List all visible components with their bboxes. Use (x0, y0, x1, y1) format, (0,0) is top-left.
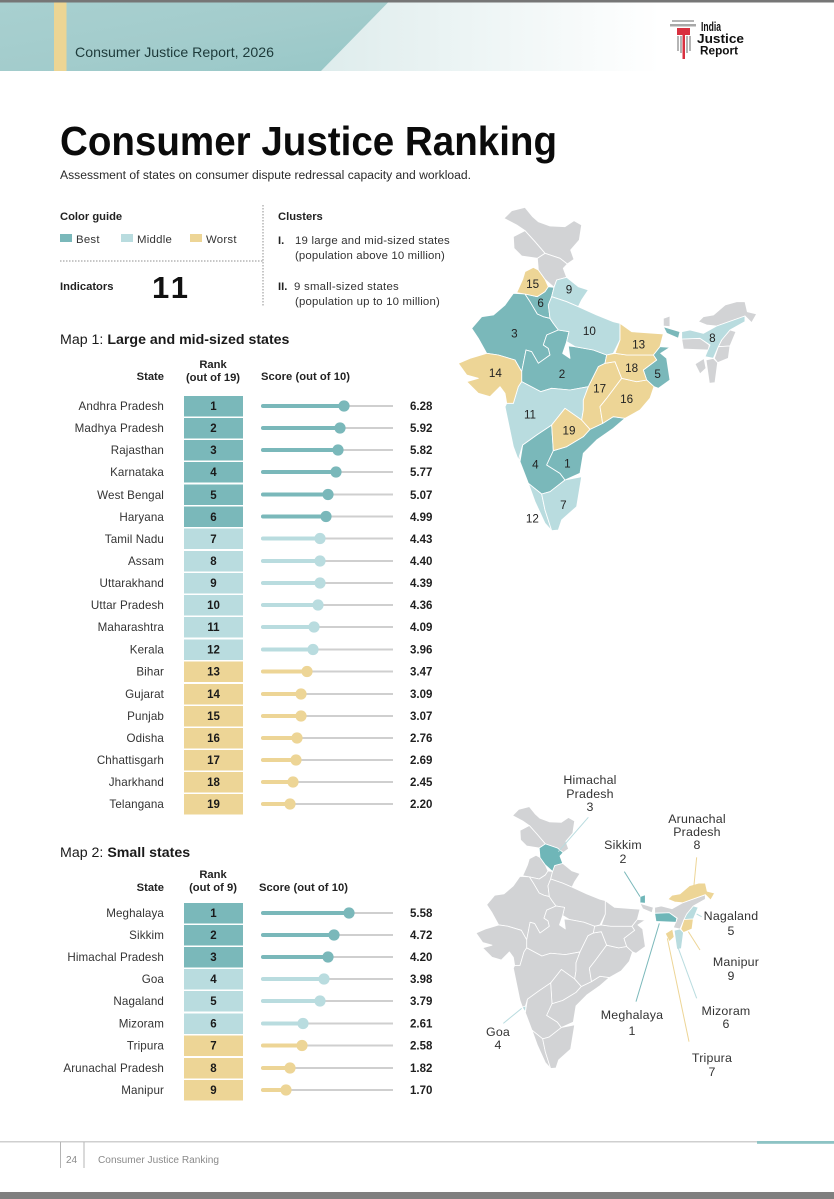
row: Kerala (130, 640, 432, 660)
clusters: Clusters (278, 211, 323, 223)
table 1 header: State (137, 371, 164, 383)
row: Assam: Assam (128, 555, 164, 568)
map 2 state labels: 4 (494, 1038, 502, 1052)
map 2 state labels: 2 (619, 852, 627, 866)
row: Telangana: 19 (207, 799, 220, 811)
row: Gujarat (125, 684, 432, 704)
row: Rajasthan: 3 (210, 445, 217, 457)
row: Goa: 3.98 (410, 974, 433, 986)
row: Himachal Pradesh: Himachal Pradesh (67, 951, 164, 964)
row: Tripura (127, 1036, 433, 1056)
logo: India Justice Report: Report (700, 44, 738, 58)
color guide: Middle (137, 234, 172, 246)
row: Arunachal Pradesh: Arunachal Pradesh (63, 1062, 164, 1075)
row: Tripura: 2.58 (410, 1040, 433, 1052)
row: Mizoram: Mizoram (119, 1018, 164, 1030)
row: Gujarat: 3.09 (410, 689, 432, 701)
map 2 state labels: 7 (708, 1065, 716, 1079)
footer section name: Consumer Justice Ranking (98, 1155, 219, 1166)
map 1 rank numbers: 15 (526, 278, 539, 291)
map 1 rank numbers: 2 (559, 368, 565, 381)
row: Andhra Pradesh: Andhra Pradesh (79, 400, 164, 413)
row: Arunachal Pradesh: 8 (210, 1063, 217, 1075)
logo: India Justice Report: India (701, 20, 722, 34)
row: Haryana: 4.99 (410, 512, 432, 524)
indicators count: 11 (152, 270, 188, 305)
map 1 rank numbers (489, 278, 716, 525)
row: Mizoram: 6 (210, 1018, 217, 1030)
map 1 rank numbers: 13 (632, 339, 645, 352)
row: Manipur (121, 1080, 432, 1100)
map 1 rank numbers: 7 (560, 499, 567, 512)
map 2 state labels: Tripura (692, 1051, 732, 1065)
title: Consumer Justice Ranking (60, 118, 557, 164)
row: Uttar Pradesh (91, 595, 432, 616)
map 2 leader lines (503, 817, 702, 1042)
map 1 rank numbers: 16 (620, 393, 633, 406)
row: Jharkhand: Jharkhand (109, 776, 164, 789)
row: Goa: Goa (142, 973, 164, 986)
row: Goa: 4 (210, 974, 217, 986)
map 1 rank numbers: 18 (625, 362, 638, 375)
row: Karnataka: Karnataka (110, 466, 164, 479)
map 1 rank numbers: 3 (511, 328, 518, 341)
map 1 rank numbers: 4 (532, 458, 539, 471)
row: Rajasthan: Rajasthan (111, 444, 164, 457)
map 1 rank numbers: 12 (526, 512, 539, 525)
row: Tamil Nadu (105, 528, 432, 549)
row: Assam: 4.40 (410, 556, 432, 568)
row: Maharashtra: 11 (207, 622, 220, 634)
table 1 header: Score (out of 10) (261, 371, 350, 383)
row: Uttarakhand (100, 573, 432, 594)
row: West Bengal: 5 (210, 490, 217, 502)
table 2 header: State (137, 882, 164, 894)
map 2 state labels: 5 (727, 924, 735, 938)
row: Haryana (119, 506, 432, 527)
row: Punjab: Punjab (127, 710, 164, 723)
table 2 header: (out of 9) (189, 882, 237, 894)
map 1 rank numbers: 8 (709, 332, 716, 345)
row: Tamil Nadu: 7 (210, 534, 217, 546)
header band (0, 0, 834, 71)
row: Tripura: Tripura (127, 1040, 164, 1052)
row: Madhya Pradesh: 5.92 (410, 423, 432, 435)
row: Goa (142, 969, 433, 990)
row: Rajasthan (111, 440, 432, 460)
row: Nagaland (113, 991, 432, 1012)
map 2 state labels: 1 (628, 1024, 636, 1038)
row: Bihar: Bihar (136, 666, 164, 678)
row: Telangana (109, 794, 432, 814)
row: Arunachal Pradesh (63, 1058, 432, 1078)
map 2 state labels: Sikkim (604, 838, 642, 852)
row: Gujarat: Gujarat (125, 688, 165, 701)
indicators count (60, 270, 188, 305)
page number: 24 (66, 1155, 78, 1166)
map 2 state labels: Himachal (563, 773, 617, 787)
row: Karnataka: 5.77 (410, 467, 432, 479)
row: Mizoram (119, 1014, 433, 1034)
logo: India Justice Report (670, 20, 744, 59)
row: Andhra Pradesh (79, 396, 433, 416)
map 2 state labels: Pradesh (566, 787, 614, 801)
row: Uttar Pradesh: 10 (207, 600, 220, 612)
row: Tamil Nadu: Tamil Nadu (105, 533, 164, 546)
row: Meghalaya (106, 903, 433, 924)
indicators count: Indicators (60, 281, 113, 293)
row: Haryana: Haryana (119, 511, 164, 524)
row: Meghalaya: 1 (210, 908, 217, 920)
row: Odisha (127, 728, 432, 748)
map 2 state labels: Manipur (713, 955, 759, 969)
map 1 rank numbers: 14 (489, 367, 502, 380)
row: Kerala: 3.96 (410, 644, 432, 656)
map 2 state labels: 9 (727, 969, 735, 983)
row: Telangana: 2.20 (410, 799, 432, 811)
color guide: Best (76, 234, 100, 246)
row: Kerala: Kerala (130, 644, 164, 656)
map 1 rank numbers: 9 (566, 284, 572, 297)
row: Karnataka (110, 462, 432, 482)
clusters (278, 211, 450, 308)
row: Himachal Pradesh: 4.20 (410, 952, 432, 964)
map 2 state labels: Nagaland (704, 909, 758, 923)
row: Sikkim: 4.72 (410, 930, 432, 942)
row: Jharkhand (109, 772, 433, 792)
row: Uttar Pradesh: Uttar Pradesh (91, 599, 164, 612)
row: Manipur: Manipur (121, 1084, 164, 1097)
row: Chhattisgarh (97, 750, 432, 770)
ranking table: small states (63, 903, 433, 1100)
row: Tripura: 7 (210, 1040, 217, 1052)
heading: map 1: Map 1: Large and mid-sized states (60, 332, 290, 348)
row: Manipur: 9 (210, 1085, 217, 1097)
row: Uttarakhand: 9 (210, 578, 217, 590)
map 1 rank numbers: 1 (564, 458, 571, 471)
table 1 header (137, 359, 350, 384)
row: Assam (128, 551, 432, 572)
subtitle: Assessment of states on consumer dispute redressal capacity and workload. (60, 170, 471, 182)
map 1 rank numbers: 6 (537, 297, 544, 310)
report name: Consumer Justice Report, 2026 (75, 44, 274, 60)
row: Punjab: 15 (207, 711, 220, 723)
row: Maharashtra: 4.09 (410, 622, 432, 634)
row: Telangana: Telangana (109, 798, 164, 811)
row: Bihar: 13 (207, 666, 220, 678)
table 1 header: (out of 19) (186, 372, 240, 384)
map 2: India choropleth, small states (476, 807, 715, 1069)
map 2 state labels: Mizoram (702, 1004, 750, 1018)
row: Sikkim: 2 (210, 930, 217, 942)
row: Madhya Pradesh: 2 (210, 423, 217, 435)
color guide: Color guide (60, 211, 122, 223)
map 2 state labels (486, 773, 759, 1079)
map 1 rank numbers: 11 (524, 408, 536, 421)
row: Nagaland: 3.79 (410, 996, 432, 1008)
map 1 rank numbers: 17 (593, 383, 606, 396)
map 1 rank numbers: 5 (654, 368, 661, 381)
row: Punjab (127, 706, 432, 726)
row: Himachal Pradesh: 3 (210, 952, 217, 964)
clusters: 19 large and mid-sized states (295, 235, 450, 247)
row: Sikkim: Sikkim (129, 929, 164, 942)
table 1 header: Rank (199, 359, 227, 371)
footer (0, 1141, 834, 1199)
clusters: II. (278, 281, 287, 293)
row: Chhattisgarh: 17 (207, 755, 220, 767)
row: Madhya Pradesh (75, 418, 432, 438)
row: Tamil Nadu: 4.43 (410, 534, 432, 546)
row: Odisha: 2.76 (410, 733, 432, 745)
map 2 state labels: 6 (722, 1017, 730, 1031)
row: Gujarat: 14 (207, 689, 220, 701)
row: Nagaland: 5 (210, 996, 217, 1008)
map 1 rank numbers: 10 (583, 325, 596, 338)
row: Haryana: 6 (210, 512, 217, 524)
row: Manipur: 1.70 (410, 1085, 432, 1097)
row: West Bengal: West Bengal (97, 489, 164, 502)
row: Odisha: Odisha (127, 732, 164, 745)
row: Madhya Pradesh: Madhya Pradesh (75, 422, 164, 435)
clusters: (population up to 10 million) (295, 296, 440, 308)
row: Punjab: 3.07 (410, 711, 432, 723)
logo: India Justice Report: Justice (697, 31, 744, 46)
row: West Bengal (97, 484, 432, 505)
row: Maharashtra: Maharashtra (98, 621, 164, 634)
row: Odisha: 16 (207, 733, 220, 745)
row: Andhra Pradesh: 1 (210, 401, 217, 413)
row: Chhattisgarh: 2.69 (410, 755, 432, 767)
clusters: 9 small-sized states (294, 281, 399, 293)
row: Chhattisgarh: Chhattisgarh (97, 754, 164, 767)
clusters: I. (278, 235, 284, 247)
row: Arunachal Pradesh: 1.82 (410, 1063, 432, 1075)
row: Rajasthan: 5.82 (410, 445, 432, 457)
table 2 header: Rank (199, 869, 227, 881)
row: Uttarakhand: Uttarakhand (100, 577, 164, 590)
row: Himachal Pradesh (67, 947, 432, 968)
row: Jharkhand: 18 (207, 777, 220, 789)
row: Meghalaya: 5.58 (410, 908, 433, 920)
row: Jharkhand: 2.45 (410, 777, 433, 789)
map 2 state labels: Goa (486, 1025, 510, 1039)
map 2 state labels: 8 (693, 838, 701, 852)
row: Assam: 8 (210, 556, 217, 568)
row: Sikkim (129, 925, 432, 946)
color guide: Worst (206, 234, 237, 246)
map 2 state labels: 3 (586, 800, 594, 814)
row: Nagaland: Nagaland (113, 995, 164, 1008)
row: West Bengal: 5.07 (410, 490, 432, 502)
map 1 rank numbers: 19 (563, 424, 575, 437)
map 2 state labels: Pradesh (673, 825, 721, 839)
color guide (60, 211, 237, 246)
row: Uttarakhand: 4.39 (410, 578, 432, 590)
map 2 state labels: Arunachal (668, 812, 726, 826)
clusters: (population above 10 million) (295, 250, 445, 262)
row: Meghalaya: Meghalaya (106, 907, 164, 920)
row: Maharashtra (98, 617, 432, 638)
row: Uttar Pradesh: 4.36 (410, 600, 432, 612)
row: Karnataka: 4 (210, 467, 217, 479)
map 2 state labels: Meghalaya (601, 1008, 663, 1022)
heading: map 2: Map 2: Small states (60, 845, 190, 861)
table 2 header: Score (out of 10) (259, 882, 348, 894)
row: Kerala: 12 (207, 644, 220, 656)
row: Bihar (136, 662, 432, 682)
row: Andhra Pradesh: 6.28 (410, 401, 433, 413)
row: Bihar: 3.47 (410, 666, 432, 678)
row: Mizoram: 2.61 (410, 1018, 433, 1030)
map 1: India choropleth, large and mid-sized states (458, 207, 757, 531)
table 2 header (137, 869, 348, 894)
ranking table: large and mid-sized states (75, 396, 433, 814)
